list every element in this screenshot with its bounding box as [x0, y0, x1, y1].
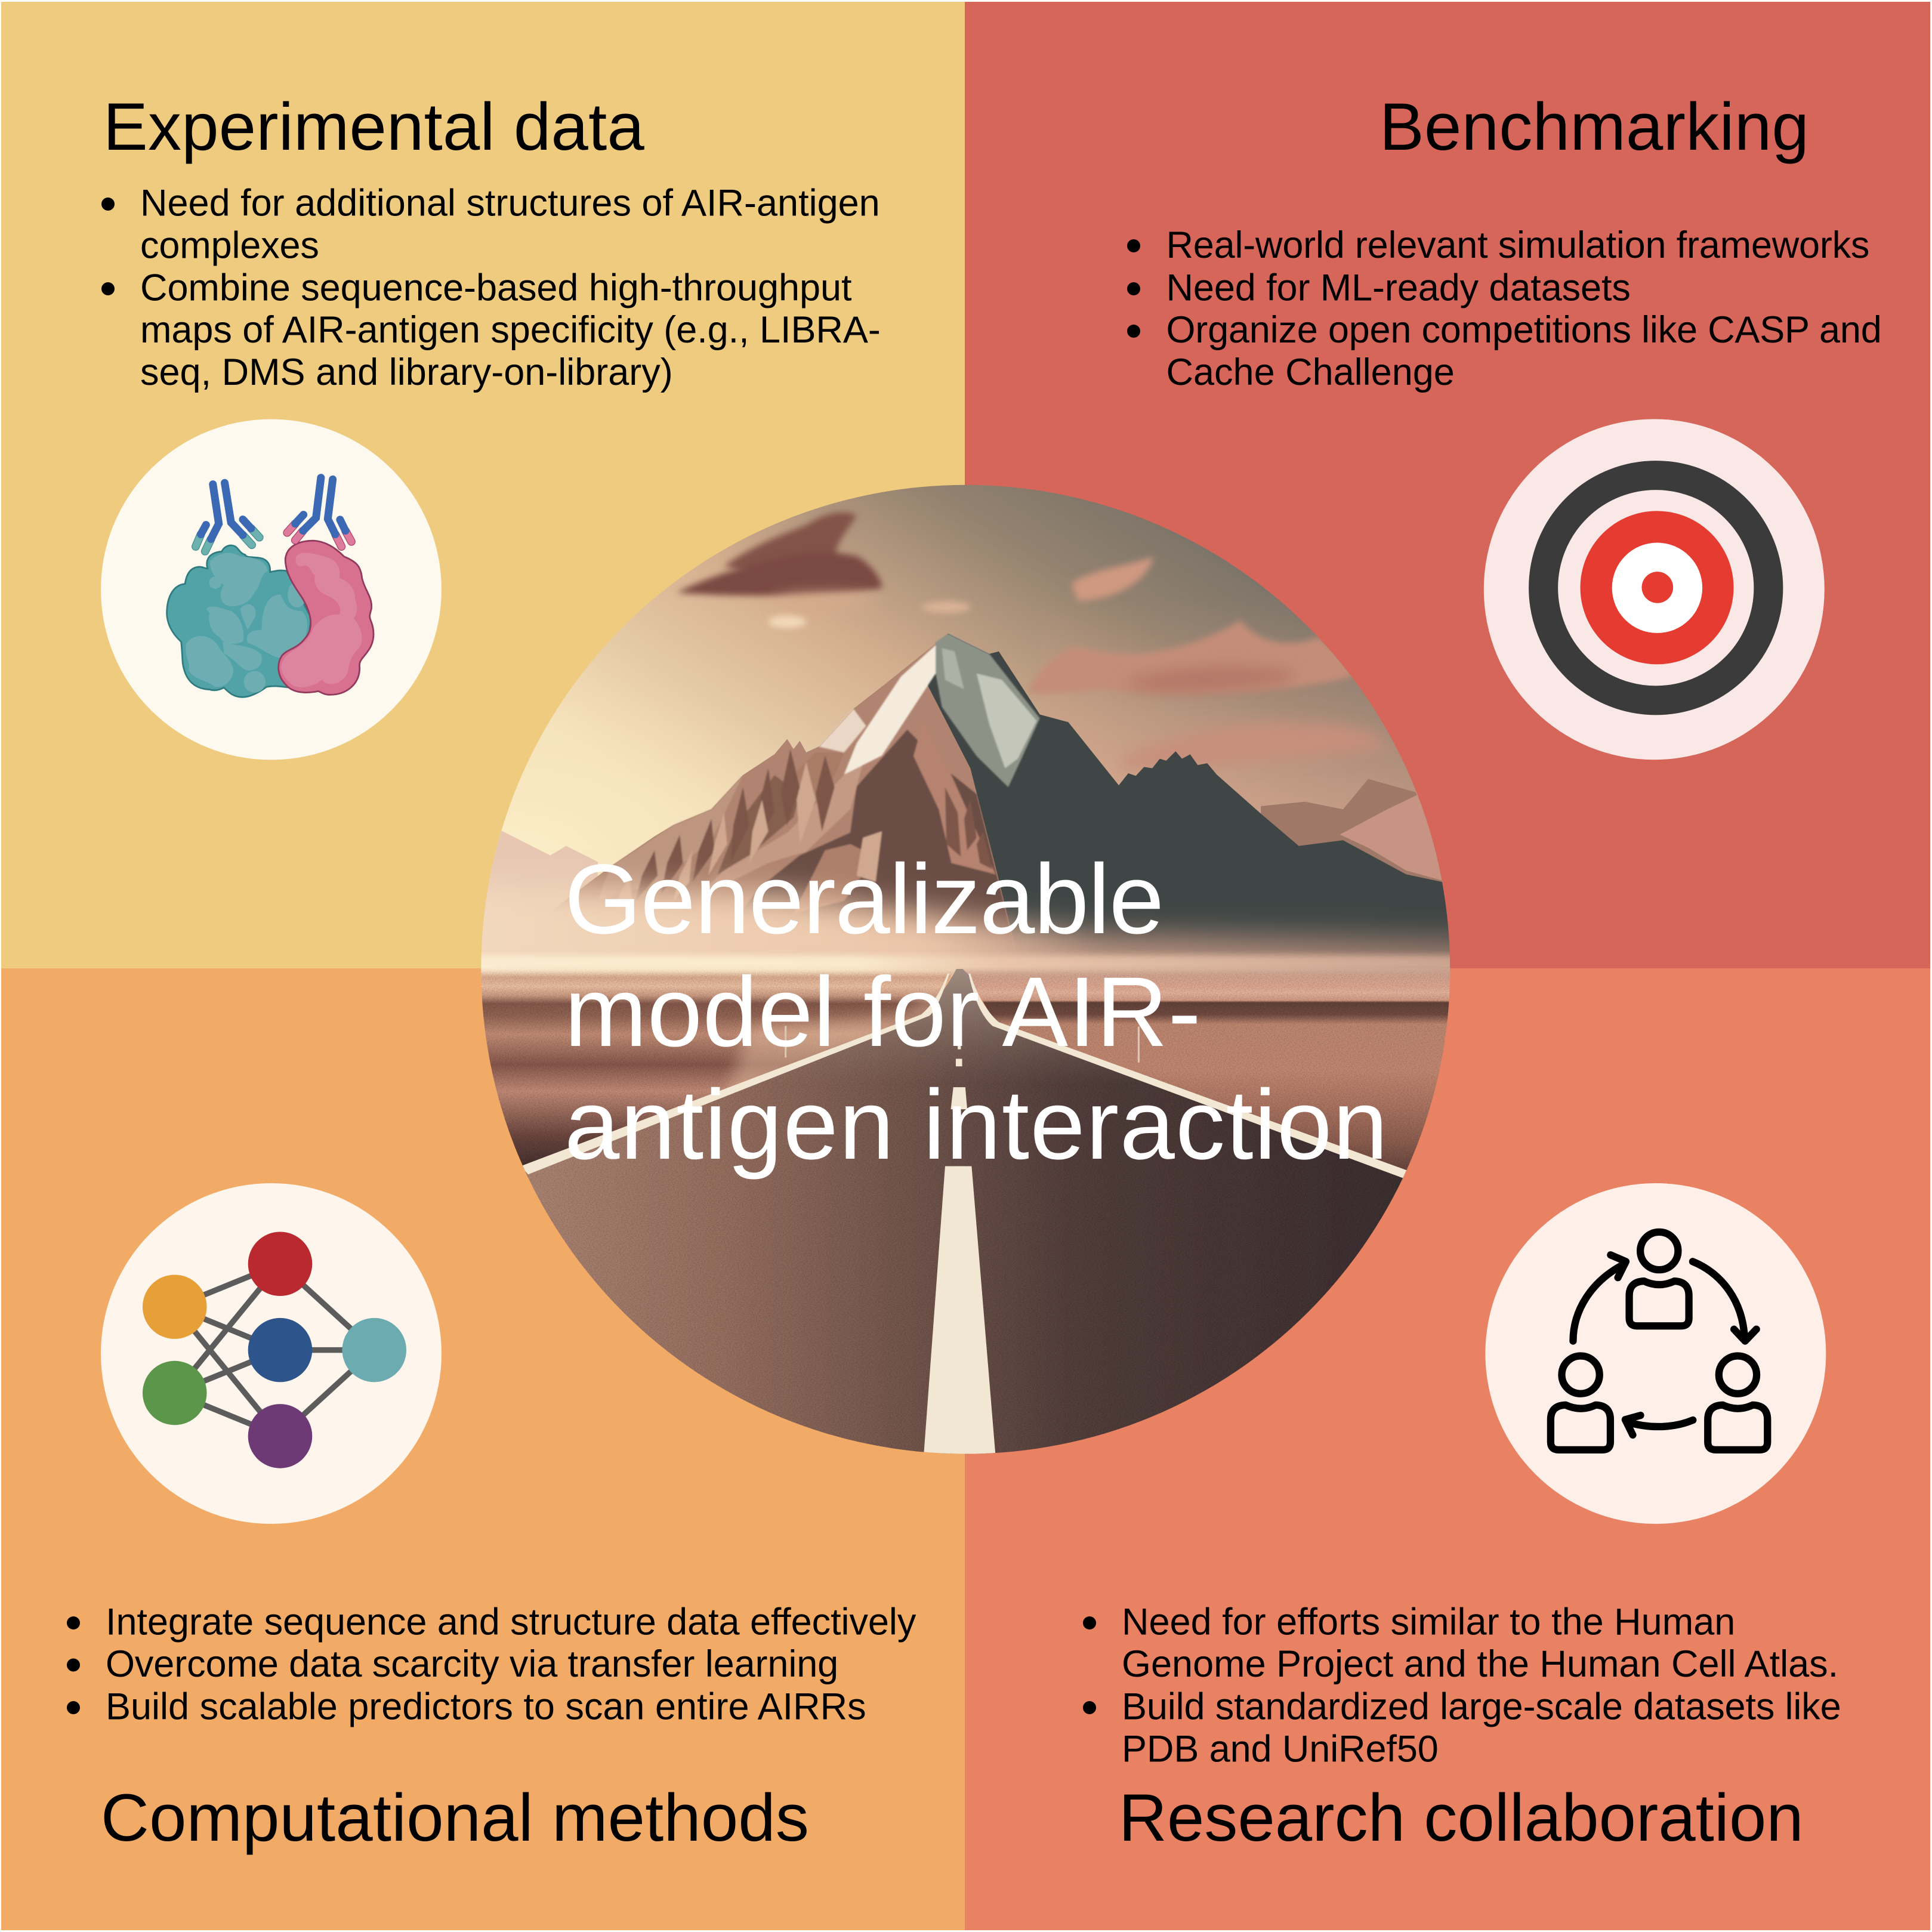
central title: Generalizable — [564, 844, 1163, 955]
icon: antibodies binding antigen — [101, 419, 442, 760]
bullet list: experimental data: complexes — [140, 224, 319, 266]
icon part: left antibody — [196, 483, 260, 551]
central title: antigen interaction — [564, 1070, 1388, 1180]
central image: mountain road — [481, 484, 1450, 1454]
bullet list: computational methods: Integrate sequence and structure data effectively — [106, 1601, 916, 1643]
distant mountains — [486, 779, 1443, 903]
rock streaks — [635, 749, 992, 901]
icon: target — [1484, 419, 1825, 760]
icon part: top person — [1629, 1232, 1689, 1326]
bullet list: computational methods: Build scalable predictors to scan entire AIRRs — [106, 1686, 866, 1728]
bullet list: research collaboration: Build standardized large-scale datasets like — [1122, 1686, 1841, 1728]
bullet list: research collaboration — [1083, 1601, 1841, 1770]
bullet list: experimental data: Combine sequence-based high-throughput — [140, 267, 852, 309]
arrow: right to left — [1625, 1415, 1693, 1435]
arrow: top to right — [1693, 1261, 1757, 1341]
bullet list: benchmarking: Cache Challenge — [1166, 351, 1455, 393]
mountain rock faces — [598, 634, 1040, 970]
icon: neural network — [101, 1183, 442, 1524]
bullet list: experimental data: seq, DMS and library-on-library) — [140, 351, 673, 393]
panel: research collaboration — [965, 968, 1930, 1930]
bullet list: research collaboration: Genome Project and the Human Cell Atlas. — [1122, 1643, 1838, 1685]
main mountain range — [484, 634, 1456, 970]
bullet list: benchmarking: Organize open competitions like CASP and — [1166, 309, 1882, 351]
bullet list: computational methods: Overcome data scarcity via transfer learning — [106, 1643, 838, 1685]
bullet list: benchmarking — [1127, 224, 1882, 393]
panel: experimental data — [1, 2, 965, 968]
heading: computational methods: Computational methods — [101, 1780, 809, 1855]
fields — [471, 955, 1482, 1204]
bullet list: computational methods — [67, 1601, 916, 1728]
central title — [564, 844, 1388, 1180]
icon part: teal antigen — [167, 545, 311, 697]
heading: experimental data: Experimental data — [103, 89, 644, 164]
arrow: left to top — [1573, 1255, 1626, 1341]
bullet list: research collaboration: PDB and UniRef50 — [1122, 1728, 1439, 1770]
horizon haze — [433, 882, 1520, 983]
icon part: right antibody — [287, 478, 351, 547]
icon part: right person — [1708, 1356, 1767, 1450]
road markings — [521, 974, 1409, 1456]
panel: computational methods — [1, 968, 965, 1930]
bullet list: research collaboration: Need for efforts similar to the Human — [1122, 1601, 1735, 1643]
bullet list: experimental data: maps of AIR-antigen specificity (e.g., LIBRA- — [140, 309, 881, 351]
panel: benchmarking — [965, 2, 1930, 968]
icon part: pink antigen — [279, 541, 374, 695]
bullet list: experimental data: Need for additional structures of AIR-antigen — [140, 183, 880, 224]
heading: research collaboration: Research collaboration — [1119, 1780, 1804, 1855]
bullet list: benchmarking: Need for ML-ready datasets — [1166, 267, 1631, 309]
icon part: left person — [1551, 1356, 1610, 1450]
heading: benchmarking: Benchmarking — [1379, 89, 1809, 164]
central title: model for AIR- — [564, 957, 1201, 1067]
clouds — [677, 513, 1387, 769]
road — [525, 969, 1403, 1454]
icon: collaboration cycle — [1485, 1183, 1826, 1524]
bullet list: benchmarking: Real-world relevant simulation frameworks — [1166, 224, 1869, 266]
bullet list: experimental data — [101, 183, 881, 393]
